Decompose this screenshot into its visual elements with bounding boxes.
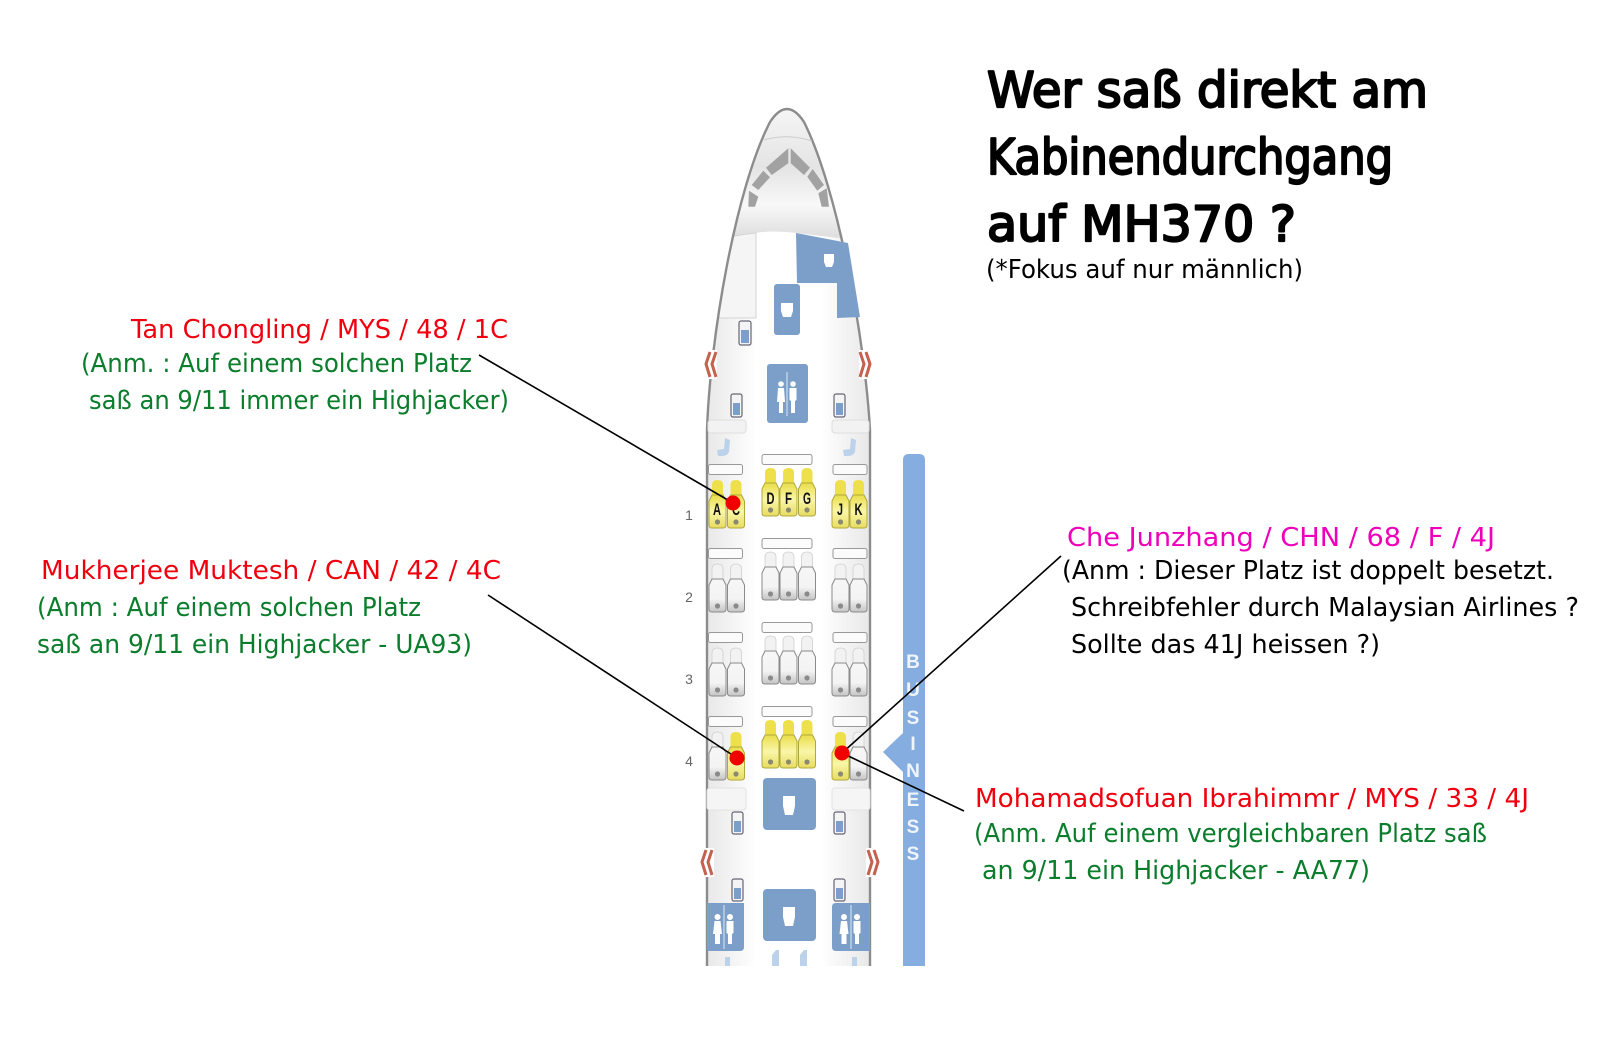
seat row 2 [708, 538, 867, 612]
callout: Che Junzhang [1062, 523, 1579, 660]
seat markers [726, 496, 850, 766]
title: auf MH370 ? [987, 196, 1296, 253]
business class bar: N [906, 761, 920, 782]
business class bar: I [910, 734, 916, 755]
seat row 1 [708, 454, 867, 528]
seat row 1: K [854, 500, 863, 519]
lower lavatories [707, 903, 870, 966]
business class bar: S [907, 708, 919, 729]
callout: Mukherjee Muktesh [37, 556, 501, 660]
callout: Mukherjee Muktesh: (Anm : Auf einem solchen Platz [37, 593, 421, 623]
business class bar: E [907, 790, 919, 811]
row numbers: 2 [685, 589, 693, 605]
seat row 1: F [785, 489, 792, 508]
row numbers [685, 507, 693, 769]
callout: Tan Chongling: (Anm. : Auf einem solchen Platz [81, 349, 472, 379]
callout: Tan Chongling [81, 315, 509, 416]
fuselage [700, 100, 880, 966]
callout: Mohamadsofuan Ibrahimmr [974, 784, 1529, 886]
title: Wer saß direkt am [987, 62, 1428, 119]
subtitle: (*Fokus auf nur männlich) [986, 255, 1303, 285]
galley block [796, 233, 860, 318]
business class bar: S [907, 844, 919, 865]
seat row 1: A [713, 500, 721, 519]
callout: Che Junzhang: Che Junzhang / CHN / 68 / F / 4J [1067, 523, 1495, 553]
callout: Mohamadsofuan Ibrahimmr: an 9/11 ein Highjacker - AA77) [982, 856, 1370, 886]
row numbers: 4 [685, 753, 693, 769]
callout: Tan Chongling: Tan Chongling / MYS / 48 / 1C [130, 315, 508, 345]
seat row 3 [708, 622, 867, 696]
title: Kabinendurchgang [987, 129, 1393, 186]
business class bar: S [907, 817, 919, 838]
title [987, 62, 1428, 253]
seat row 4 [708, 706, 867, 780]
seat map: aircraft nose and business cabin [685, 100, 880, 966]
business class bar: B [906, 652, 920, 673]
callout: Mukherjee Muktesh: Mukherjee Muktesh / CAN / 42 / 4C [41, 556, 501, 586]
cup icons [781, 254, 834, 317]
lower galley and fittings [707, 778, 870, 941]
upper fittings [708, 321, 869, 456]
exit chevrons [700, 350, 880, 877]
callout: Mukherjee Muktesh: saß an 9/11 ein Highjacker - UA93) [37, 630, 472, 660]
row numbers: 3 [685, 671, 693, 687]
seat row 1: C [732, 500, 740, 519]
callout: Tan Chongling: saß an 9/11 immer ein Highjacker) [89, 386, 509, 416]
seat row 1: G [803, 489, 811, 508]
callout: Che Junzhang: (Anm : Dieser Platz ist doppelt besetzt. [1062, 556, 1554, 586]
seat row 1: D [766, 489, 774, 508]
callout: Che Junzhang: Sollte das 41J heissen ?) [1071, 630, 1380, 660]
callout: Che Junzhang: Schreibfehler durch Malaysian Airlines ? [1071, 593, 1579, 623]
galley box [774, 284, 800, 335]
cockpit windows [748, 148, 829, 207]
business class bar: U [906, 680, 920, 701]
callout: Mohamadsofuan Ibrahimmr: (Anm. Auf einem vergleichbaren Platz saß [974, 819, 1487, 849]
callout: Mohamadsofuan Ibrahimmr: Mohamadsofuan Ibrahimmr / MYS / 33 / 4J [975, 784, 1529, 814]
leader lines [479, 355, 1061, 811]
row numbers: 1 [685, 507, 693, 523]
seat row 1: J [837, 500, 843, 519]
lavatory [767, 364, 808, 423]
business class bar [883, 454, 925, 966]
